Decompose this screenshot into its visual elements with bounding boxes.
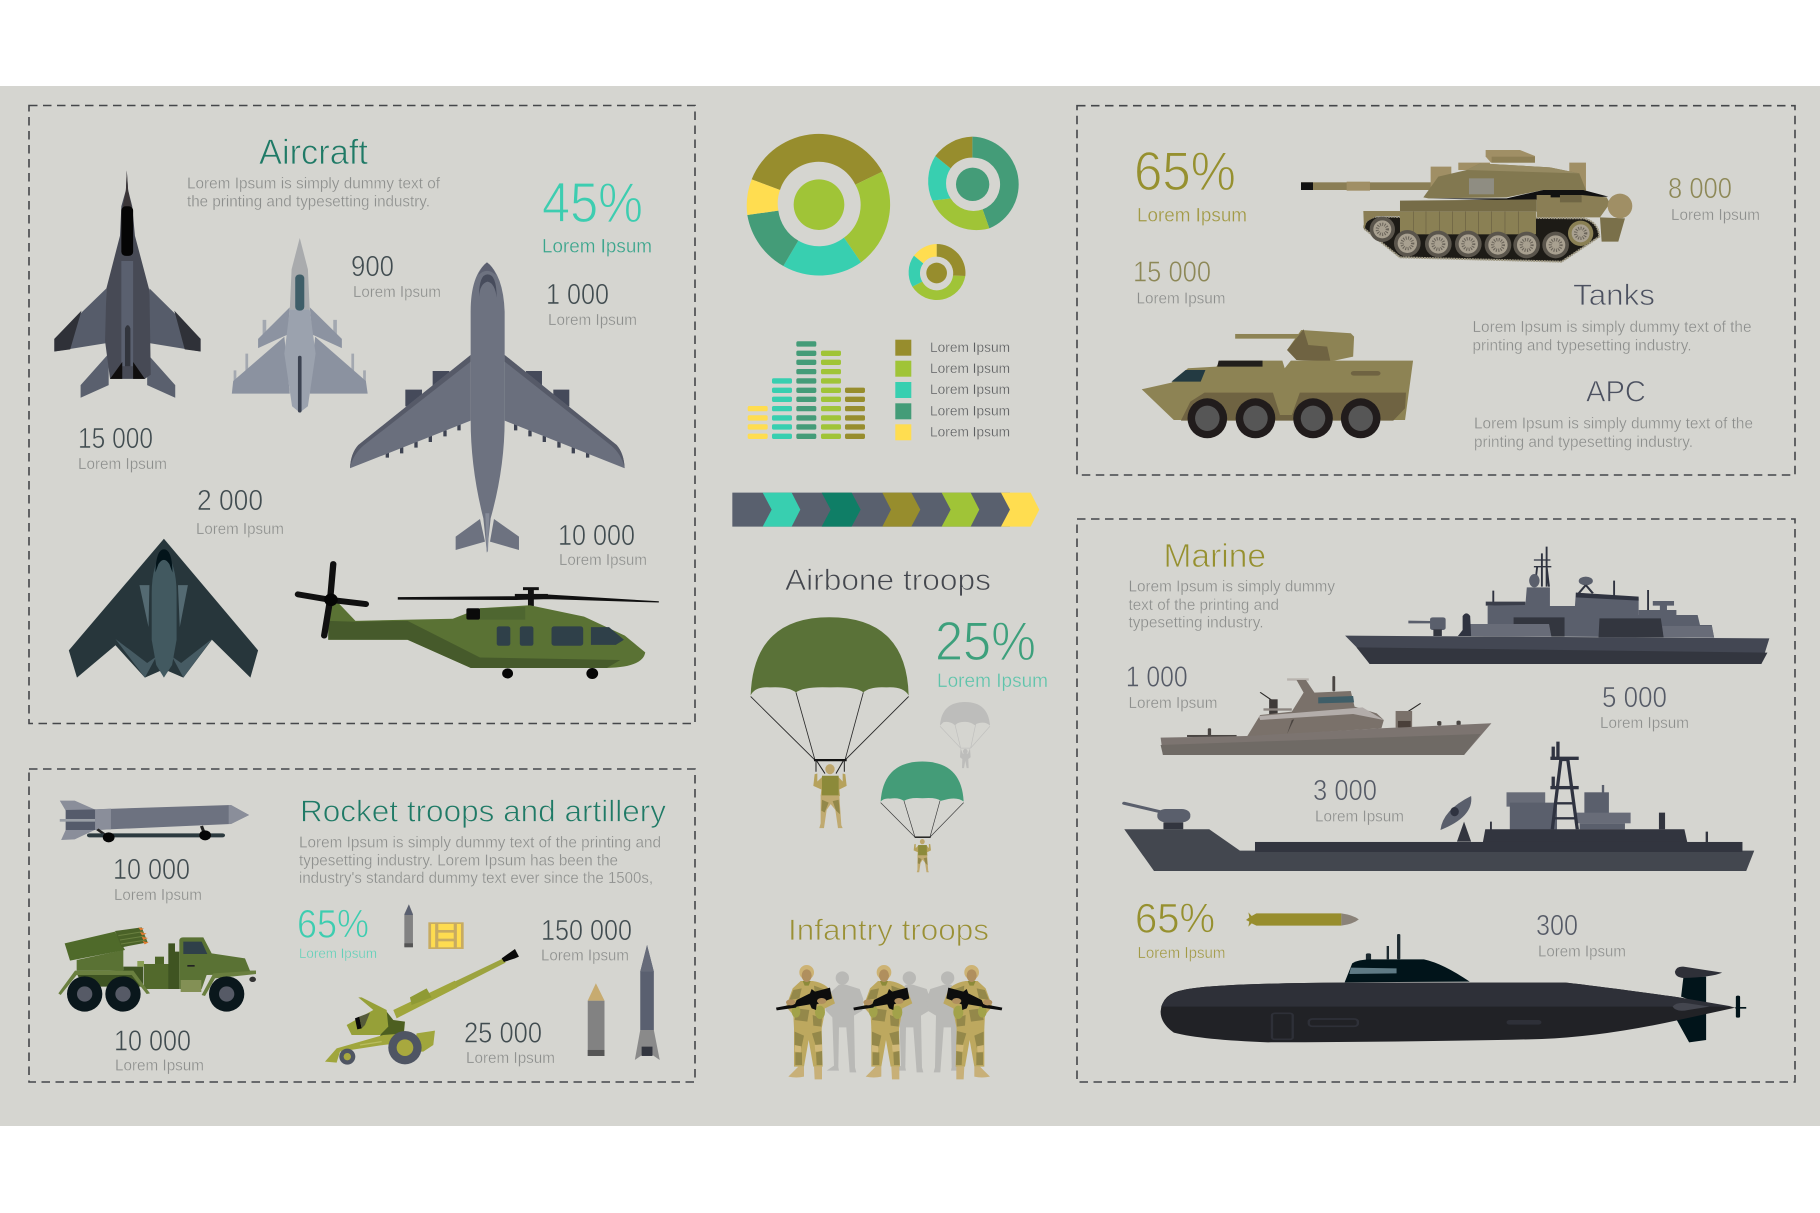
stat: 25%: Lorem Ipsum bbox=[937, 671, 1048, 692]
stat: 2 000: Lorem Ipsum bbox=[196, 521, 284, 538]
chart: medium donut bbox=[928, 137, 1019, 230]
stat: 300: 300 bbox=[1536, 910, 1578, 942]
stat: 25%: 25% bbox=[935, 610, 1036, 672]
stat: 900: Lorem Ipsum bbox=[353, 284, 441, 301]
icon: cruise missile bbox=[60, 801, 249, 842]
icon: dark fighter jet bbox=[54, 170, 201, 398]
heading: Rocket troops and artillery: Rocket troops and artillery bbox=[300, 794, 667, 828]
stat: 3 000: Lorem Ipsum bbox=[1315, 808, 1404, 826]
stat: 10 000 bbox=[558, 520, 647, 569]
stat: 10 000: 10 000 bbox=[558, 520, 635, 552]
stat: 1 000 bbox=[546, 279, 637, 329]
text block: rocket intro bbox=[299, 834, 661, 887]
stat: 1 000: Lorem Ipsum bbox=[1128, 695, 1218, 712]
stat: 2 000 bbox=[196, 485, 284, 538]
stat: 65%: Lorem Ipsum bbox=[299, 945, 377, 961]
stat: 300 bbox=[1536, 910, 1626, 960]
icon: howitzer bbox=[325, 949, 519, 1065]
icon: grey delta fighter bbox=[232, 238, 368, 413]
chart: donut charts bbox=[747, 134, 1019, 300]
stat: 10 000 launcher: Lorem Ipsum bbox=[115, 1058, 204, 1074]
stat: 8 000: Lorem Ipsum bbox=[1671, 207, 1760, 224]
panel: marine bbox=[1077, 519, 1795, 1082]
legend: Lorem Ipsum bbox=[930, 361, 1010, 376]
stat: 25 000: Lorem Ipsum bbox=[466, 1050, 555, 1067]
stat: 10 000 missile: 10 000 bbox=[113, 854, 190, 886]
text block: APC bbox=[1474, 416, 1753, 451]
text block: tanks bbox=[1472, 319, 1752, 354]
stat: 5 000: 5 000 bbox=[1602, 682, 1667, 714]
stat: 900: 900 bbox=[351, 251, 394, 283]
stat: 15 000: Lorem Ipsum bbox=[1136, 290, 1226, 308]
text block: rocket intro: Lorem Ipsum is simply dummy text of the printing and bbox=[299, 834, 661, 852]
stat: 25 000: 25 000 bbox=[464, 1018, 542, 1050]
chart: large donut bbox=[747, 134, 890, 276]
stat: 1 000: 1 000 bbox=[546, 279, 609, 311]
icon: destroyer bbox=[1124, 742, 1754, 871]
stat: 300: Lorem Ipsum bbox=[1538, 944, 1626, 960]
stat: 65% marine bbox=[1135, 894, 1226, 962]
stat: 1 000: 1 000 bbox=[1126, 662, 1188, 694]
heading: Aircraft: Aircraft bbox=[259, 133, 368, 172]
stat: 15 000: 15 000 bbox=[1133, 256, 1211, 288]
heading: Infantry troops: Infantry troops bbox=[788, 914, 989, 947]
stat: 150 000 bbox=[541, 915, 632, 964]
legend: Lorem Ipsum bbox=[930, 404, 1010, 418]
text block: rocket intro: industry's standard dummy text ever since the 1500s, bbox=[299, 870, 653, 887]
stat: 15 000: Lorem Ipsum bbox=[78, 456, 167, 473]
stat: 150 000: 150 000 bbox=[541, 915, 632, 947]
panel: tanks and APC bbox=[1077, 106, 1795, 475]
icon: patrol boat bbox=[1161, 676, 1491, 755]
icon: submarine bbox=[1161, 934, 1746, 1042]
stat: 15 000 bbox=[78, 423, 167, 473]
legend bbox=[895, 340, 1010, 440]
chevron arrow bar bbox=[732, 493, 1039, 527]
stat: 3 000 bbox=[1313, 775, 1404, 826]
stat: 65% tanks: Lorem Ipsum bbox=[1137, 206, 1247, 226]
heading: Airbone troops: Airbone troops bbox=[785, 564, 991, 597]
stat: 10 000 missile: Lorem Ipsum bbox=[114, 887, 202, 904]
stat: 5 000 bbox=[1600, 682, 1689, 732]
icon: large shell bbox=[588, 983, 604, 1056]
icon: infantry soldiers bbox=[776, 965, 1002, 1079]
icon: armoured personnel carrier bbox=[1142, 329, 1413, 438]
stat: 900 bbox=[351, 251, 441, 301]
stat: 45%: Lorem Ipsum bbox=[542, 236, 652, 258]
stat: 2 000: 2 000 bbox=[197, 485, 263, 517]
stat: 65% tanks bbox=[1134, 140, 1247, 226]
text block: tanks: Lorem Ipsum is simply dummy text of the bbox=[1472, 319, 1752, 336]
stat: 10 000 missile bbox=[113, 854, 202, 904]
icon: tank bbox=[1301, 150, 1632, 262]
legend: Lorem Ipsum bbox=[930, 382, 1010, 397]
legend: Lorem Ipsum bbox=[930, 424, 1010, 440]
text block: marine intro: typesetting industry. bbox=[1128, 614, 1264, 632]
icon: helicopter bbox=[298, 564, 659, 679]
icon: stealth bomber bbox=[69, 539, 258, 678]
chart: stacked bars bbox=[748, 341, 865, 439]
panel: aircraft bbox=[29, 106, 695, 724]
text block: rocket intro: typesetting industry. Lorem Ipsum has been the bbox=[299, 852, 618, 870]
text block: marine intro bbox=[1128, 578, 1335, 632]
text block: marine intro: Lorem Ipsum is simply dummy bbox=[1128, 578, 1335, 596]
icon: rocket launcher truck bbox=[58, 927, 256, 1012]
stat: 1 000: Lorem Ipsum bbox=[548, 312, 637, 329]
stat: 10 000: Lorem Ipsum bbox=[559, 552, 647, 569]
stat: 15 000 bbox=[1133, 256, 1226, 308]
stat: 3 000: 3 000 bbox=[1313, 775, 1377, 807]
chart: small donut bbox=[909, 244, 965, 300]
stat: 65% marine: 65% bbox=[1135, 894, 1215, 942]
stat: 65% tanks: 65% bbox=[1134, 140, 1236, 202]
stat: 25 000 bbox=[464, 1018, 555, 1067]
heading: Marine: Marine bbox=[1164, 537, 1266, 574]
stat: 8 000: 8 000 bbox=[1668, 173, 1732, 205]
text block: marine intro: text of the printing and bbox=[1128, 597, 1279, 614]
stat: 5 000: Lorem Ipsum bbox=[1600, 715, 1689, 732]
icon: green paratrooper bbox=[881, 762, 964, 872]
stat: 45%: 45% bbox=[542, 171, 643, 235]
stat: 65%: 65% bbox=[297, 902, 369, 946]
stat: 65% marine: Lorem Ipsum bbox=[1138, 945, 1226, 962]
icon: ballistic rocket bbox=[635, 945, 660, 1060]
panel: rocket troops and artillery bbox=[29, 769, 695, 1082]
stat: 10 000 launcher bbox=[114, 1026, 204, 1074]
text block: APC: printing and typesetting industry. bbox=[1474, 434, 1693, 451]
text block: APC: Lorem Ipsum is simply dummy text of the bbox=[1474, 416, 1753, 432]
icon: faded paratrooper bbox=[940, 702, 990, 768]
icon: large paratrooper bbox=[751, 617, 909, 828]
legend: Lorem Ipsum bbox=[930, 340, 1010, 355]
text block: tanks: printing and typesetting industry. bbox=[1472, 338, 1692, 354]
stat: 10 000 launcher: 10 000 bbox=[114, 1026, 191, 1058]
icon: torpedo bbox=[1246, 912, 1359, 927]
text block: aircraft intro: the printing and typesetting industry. bbox=[187, 194, 430, 210]
stat: 15 000: 15 000 bbox=[78, 423, 153, 455]
heading: Tanks: Tanks bbox=[1573, 279, 1655, 312]
icon: small shell bbox=[404, 904, 413, 947]
text block: aircraft intro bbox=[187, 176, 441, 210]
text block: aircraft intro: Lorem Ipsum is simply dummy text of bbox=[187, 176, 441, 192]
stat: 8 000 bbox=[1668, 173, 1760, 224]
heading: APC: APC bbox=[1586, 376, 1646, 408]
icon: transport plane bbox=[350, 262, 625, 553]
icon: frigate bbox=[1345, 547, 1769, 664]
stat: 150 000: Lorem Ipsum bbox=[541, 948, 629, 964]
icon: ammunition crate bbox=[428, 922, 464, 949]
stat: 1 000 bbox=[1126, 662, 1218, 712]
